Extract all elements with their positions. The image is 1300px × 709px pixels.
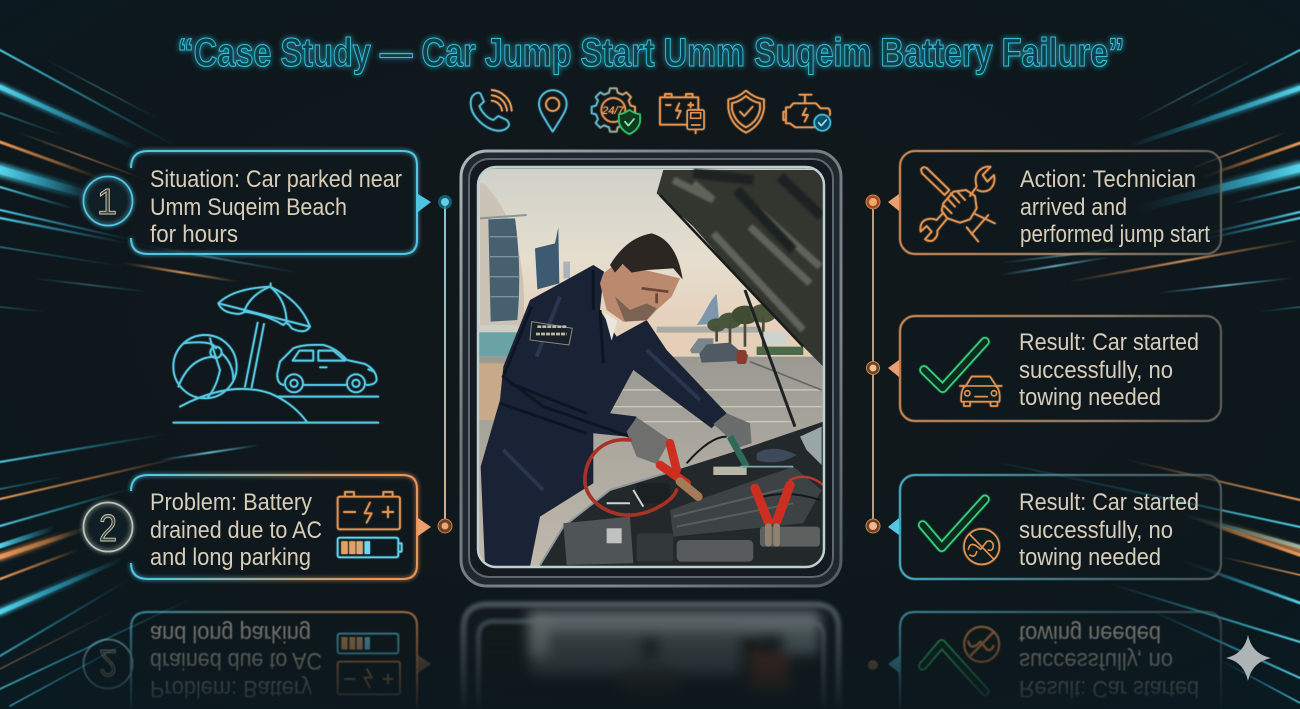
- reflection: [84, 604, 1221, 707]
- photo: technician jump starting a car: [478, 168, 825, 570]
- pointer: [418, 518, 431, 536]
- photo frame: [461, 151, 841, 586]
- reflected panel: result: towing needed: [1019, 620, 1161, 647]
- icon: 24/7 service gear: 24/7: [601, 105, 625, 117]
- icon: 24/7 service gear: [592, 88, 640, 134]
- pointer: [418, 194, 431, 212]
- panel: result no towing: [888, 475, 1221, 579]
- icon: hand holding crossed tools: [920, 167, 995, 242]
- text: problem: Problem: Battery: [150, 489, 312, 516]
- text: result 2: Result: Car started: [1019, 489, 1199, 516]
- text: result 2: successfully, no: [1019, 517, 1173, 544]
- number badge 1: 1: [97, 181, 117, 222]
- hood strut: [745, 290, 795, 427]
- panel: situation: [84, 151, 431, 254]
- text: action: [1020, 166, 1210, 248]
- reflected panel: result: successfully, no: [1019, 647, 1173, 674]
- text: action: arrived and: [1020, 194, 1127, 221]
- reflected panel: result: [868, 612, 1221, 707]
- reflected panel: problem: 2: [99, 641, 117, 683]
- text: result 1: [1019, 329, 1199, 411]
- icon: shield: [728, 91, 764, 133]
- text: problem: and long parking: [150, 544, 311, 571]
- Burj sail: [480, 183, 524, 325]
- text: problem: [150, 489, 322, 571]
- text: action: performed jump start: [1020, 221, 1210, 248]
- text: result 1: Result: Car started: [1019, 329, 1199, 356]
- ground: [478, 357, 825, 570]
- shirt: [604, 313, 617, 341]
- gloves: [627, 417, 670, 464]
- number badge 1: [84, 176, 132, 226]
- text: result 2: towing needed: [1019, 544, 1161, 571]
- sleeve patch: [530, 322, 572, 345]
- icon row: [471, 88, 830, 134]
- pointer: [888, 194, 899, 211]
- reflected panel: result: Result: Car started: [1019, 675, 1199, 702]
- text: action: Action: Technician: [1020, 166, 1196, 193]
- far sail building: [697, 294, 719, 325]
- panel: action: [888, 151, 1221, 254]
- pointer: [888, 518, 899, 535]
- engine bay: [538, 422, 823, 568]
- text: situation: for hours: [150, 221, 238, 248]
- reflected panel: problem: and long parking: [150, 620, 311, 647]
- panel: problem: [84, 475, 431, 579]
- icon: sparkle watermark: [1226, 635, 1271, 681]
- timeline: right: [866, 195, 880, 533]
- text: situation: Situation: Car parked near: [150, 166, 402, 193]
- icon: beach umbrella, ball and car: [173, 283, 378, 423]
- reflected panel: problem: drained due to AC: [150, 647, 322, 674]
- jumper cables and clamps: [585, 440, 823, 543]
- text: situation: [150, 166, 402, 248]
- number badge 2: 2: [99, 508, 117, 550]
- hair: [610, 233, 683, 279]
- icon: battery and charge level: [338, 492, 402, 557]
- icon: green check and car: [924, 342, 1002, 406]
- text: result 1: towing needed: [1019, 384, 1161, 411]
- panel: result with car: [888, 316, 1221, 421]
- pointer: [888, 360, 899, 377]
- reflected frame: [463, 604, 839, 707]
- text: result 2: [1019, 489, 1199, 571]
- reflected panel: problem: Problem: Battery: [150, 675, 312, 702]
- icon: engine with check: [783, 95, 830, 131]
- number badge 2: [84, 502, 132, 552]
- icon: battery with tester: [660, 94, 704, 133]
- text: situation: Umm Suqeim Beach: [150, 194, 347, 221]
- technician coverall: [481, 265, 727, 567]
- palms: [707, 304, 803, 355]
- icon: phone: [471, 90, 512, 131]
- hood: [657, 170, 825, 368]
- sea: [478, 332, 518, 357]
- text: problem: drained due to AC: [150, 517, 322, 544]
- reflected panel: problem: [84, 612, 431, 707]
- neck and face: [600, 263, 680, 322]
- timeline: left: [438, 195, 452, 533]
- icon: green check and no tow: [923, 499, 999, 564]
- icon: location pin: [539, 90, 567, 132]
- far car: [690, 338, 748, 364]
- text: result 1: successfully, no: [1019, 357, 1173, 384]
